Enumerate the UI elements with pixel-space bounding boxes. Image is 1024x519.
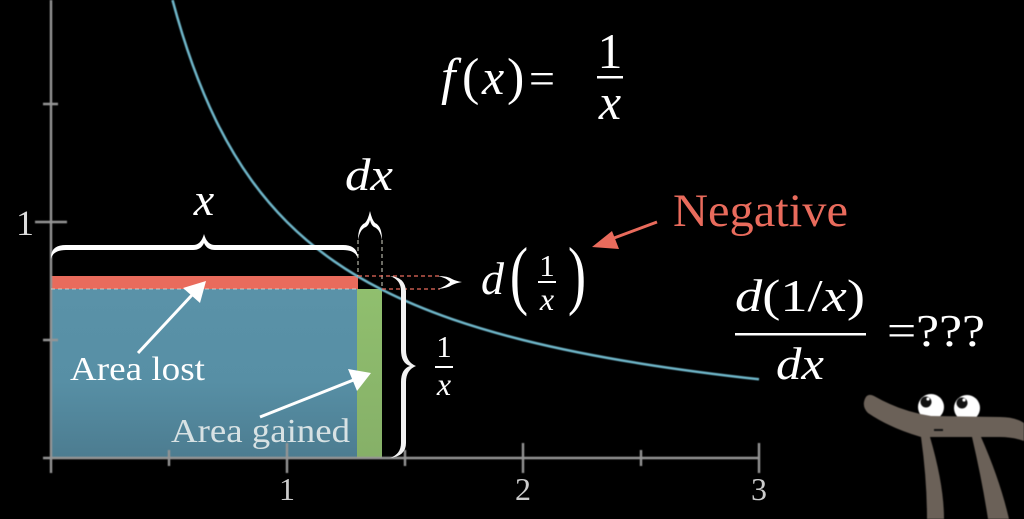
eye: right [954, 395, 980, 421]
y axis label 1: 1 [16, 203, 34, 243]
brace over x [51, 234, 358, 259]
small brace for d(1/x) [438, 276, 462, 289]
brace for 1/x height [390, 276, 416, 458]
dashed guides for dx [358, 240, 382, 289]
label 1/x: 1 [436, 329, 452, 364]
pi body [864, 395, 1024, 519]
formula: d(1/x)/dx = ??? [735, 270, 985, 389]
brace over dx [358, 211, 382, 240]
area gained strip [357, 289, 382, 458]
label d(1/x): x [539, 281, 554, 317]
axes [35, 0, 759, 473]
area lost strip [51, 276, 358, 289]
label x: x [193, 174, 215, 225]
label d(1/x): d [481, 253, 505, 304]
pi creature [864, 394, 1024, 519]
label d(1/x) [481, 233, 586, 317]
formula: f(x) = 1/x: = [529, 53, 555, 104]
label 1/x: x [436, 366, 451, 402]
dashed guides for d(1/x) [358, 276, 440, 289]
formula: f(x) = 1/x: ( [462, 49, 479, 106]
x axis labels: 1 [279, 471, 295, 507]
label dx: dx [345, 149, 394, 200]
label d(1/x): 1 [539, 248, 555, 283]
mouth [934, 429, 943, 431]
arrow to d(1/x) [592, 222, 657, 249]
formula: f(x) = 1/x: x [481, 49, 504, 105]
formula: f(x) = 1/x [441, 23, 623, 130]
formula: f(x) = 1/x: f [441, 49, 462, 106]
label 1/x [435, 329, 453, 402]
formula: d(1/x)/dx = ???: =??? [887, 305, 985, 356]
formula: f(x) = 1/x: x [598, 74, 621, 130]
dashed edge between red and blue [51, 288, 358, 290]
x axis labels: 2 [515, 471, 531, 507]
formula: f(x) = 1/x: 1 [598, 23, 622, 79]
arrow: area lost [138, 281, 206, 353]
arrow: area gained [260, 369, 371, 417]
area rectangle: x times 1/x [51, 289, 357, 458]
curve: y = 1/x [172, 0, 759, 379]
label d(1/x): ) [568, 233, 586, 317]
x axis labels: 3 [751, 471, 767, 507]
formula: f(x) = 1/x: ) [507, 49, 524, 106]
formula: d(1/x)/dx = ???: dx [776, 338, 825, 389]
x axis labels [279, 471, 767, 507]
label d(1/x): ( [510, 233, 528, 317]
label Area lost: Area lost [70, 351, 206, 388]
label Area gained: Area gained [171, 413, 350, 450]
eye: left [918, 394, 944, 420]
label Negative: Negative [673, 185, 848, 237]
formula: d(1/x)/dx = ???: d(1/x) [735, 270, 865, 321]
